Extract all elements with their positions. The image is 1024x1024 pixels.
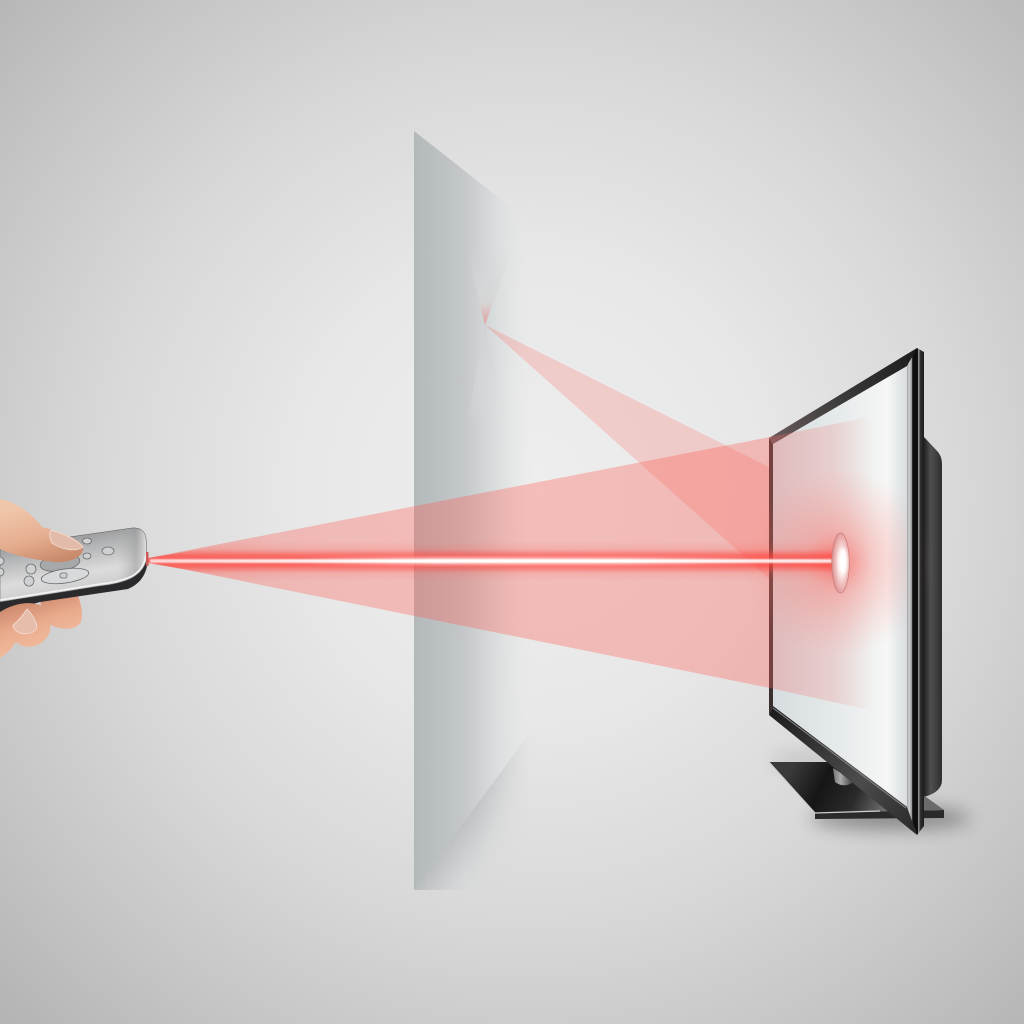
reflection point creases xyxy=(467,250,512,425)
remote bright rim xyxy=(0,556,146,600)
remote control xyxy=(0,528,148,613)
red emitter xyxy=(146,552,148,566)
bottom bezel xyxy=(769,706,917,835)
top bezel xyxy=(769,348,917,444)
thumb nail xyxy=(50,530,83,550)
light spot on screen xyxy=(832,533,849,593)
panel: reflecting wall xyxy=(414,131,520,890)
glow around light spot on screen xyxy=(746,467,930,657)
left bezel xyxy=(769,438,773,715)
signal cone from remote xyxy=(148,437,770,688)
finger nail xyxy=(13,609,37,634)
lower finger behind xyxy=(40,596,82,629)
hand holding remote xyxy=(0,499,148,658)
index finger xyxy=(0,603,50,658)
remote underside xyxy=(0,556,148,613)
screen glass xyxy=(773,366,907,807)
signal cone on screen xyxy=(770,416,874,711)
laser beam xyxy=(148,541,838,581)
reflected beam xyxy=(485,325,793,600)
stand shadow xyxy=(810,807,970,829)
television xyxy=(769,348,970,835)
wall fold shadow xyxy=(414,750,518,890)
stand left shadow xyxy=(770,754,850,766)
remote top face xyxy=(0,528,147,602)
tv right edge frame xyxy=(907,348,924,835)
remote buttons xyxy=(0,538,114,586)
stand neck xyxy=(833,768,852,785)
tv back housing xyxy=(924,437,942,797)
thumb xyxy=(0,499,83,562)
stand base xyxy=(769,762,944,819)
